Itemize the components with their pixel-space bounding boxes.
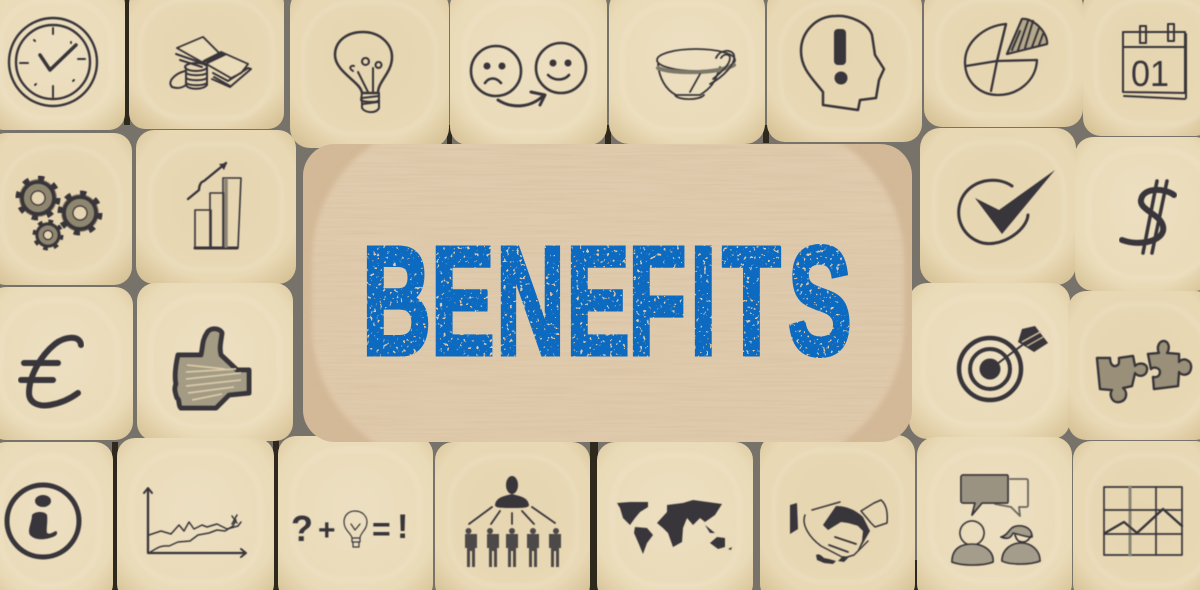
icon: question plus bulb equals exclamation — [291, 508, 408, 549]
icon: head with exclamation mark — [801, 16, 884, 110]
icon: euro sign — [21, 338, 81, 406]
title: BENEFITS: BENEFITS — [362, 216, 852, 388]
block: handshake — [760, 435, 915, 590]
icon: dollar sign — [1122, 181, 1174, 253]
icon: teacup — [657, 49, 735, 99]
block: gears — [0, 133, 132, 285]
block: money — [129, 0, 284, 129]
icon: question plus bulb equals exclamation: ? — [291, 508, 313, 549]
icon: gears — [19, 179, 99, 248]
icon: puzzle pieces — [1097, 341, 1191, 402]
icon: leader and team hierarchy — [465, 476, 561, 567]
block: check mark — [920, 128, 1076, 285]
icon: light bulb — [335, 32, 392, 112]
icon: rising bar chart — [188, 163, 241, 248]
block: light bulb — [290, 0, 449, 148]
block: calendar — [1083, 0, 1200, 136]
block: rising bars — [136, 130, 296, 284]
block: info — [0, 442, 113, 590]
block: head — [767, 0, 922, 142]
icon: two people talking — [952, 475, 1040, 565]
icon: question plus bulb equals exclamation: = — [372, 511, 391, 547]
icon: line chart — [144, 488, 246, 557]
icon: calendar — [1123, 24, 1186, 99]
icon: clock — [9, 18, 97, 106]
block: grid chart — [1073, 441, 1200, 590]
block: target — [909, 283, 1070, 439]
block: faces — [450, 0, 607, 145]
icon: world map — [617, 500, 732, 554]
icon: sad to happy faces — [471, 43, 586, 106]
block: question plus idea equals — [278, 436, 433, 590]
icon: money — [170, 37, 251, 89]
icon: question plus bulb equals exclamation: + — [318, 514, 336, 547]
block: thumbs up — [137, 283, 293, 441]
icon: target with dart — [959, 326, 1048, 400]
icon: pie chart — [965, 19, 1047, 95]
block: dollar — [1075, 137, 1200, 291]
block: euro — [0, 287, 133, 440]
block: puzzle — [1068, 291, 1200, 440]
icon: handshake — [790, 500, 887, 564]
block: conversation — [917, 437, 1072, 590]
icon: question plus bulb equals exclamation: ! — [397, 508, 408, 546]
text: calendar date: 01 — [1131, 53, 1169, 94]
block: hierarchy — [435, 442, 590, 590]
block: clock — [0, 0, 125, 130]
icon: check mark in circle — [959, 170, 1055, 244]
block: world map — [597, 442, 753, 590]
icon: grid line chart — [1104, 487, 1182, 555]
icon: information — [7, 485, 79, 557]
block: line chart — [117, 438, 274, 590]
icon: thumbs up — [175, 329, 249, 408]
block: pie chart — [924, 0, 1083, 127]
block: cup — [609, 0, 765, 144]
central block — [303, 144, 912, 442]
